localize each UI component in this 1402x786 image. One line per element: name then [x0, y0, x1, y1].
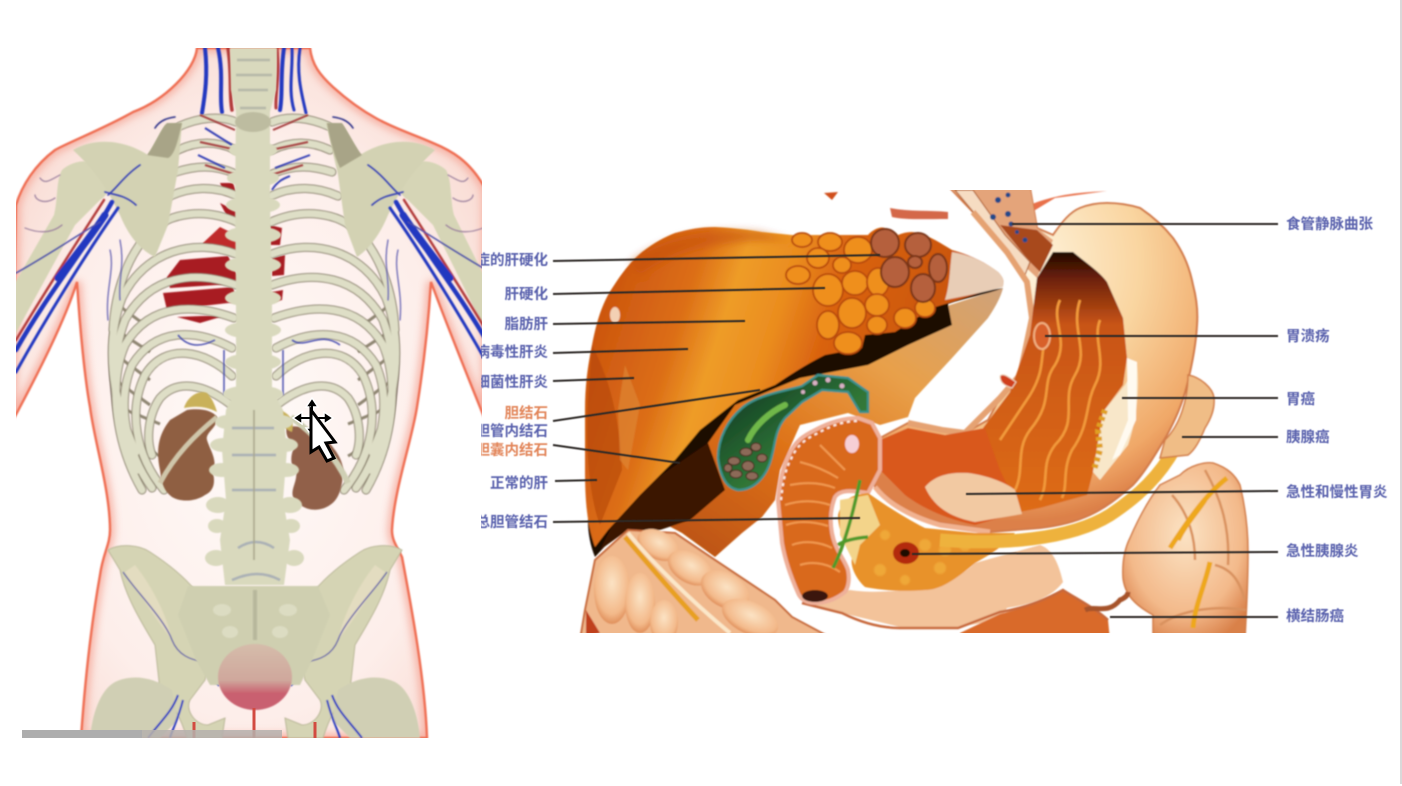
- lesion core: [900, 549, 910, 557]
- liver left darker mottling: [587, 345, 622, 525]
- liver labels: [461, 251, 548, 531]
- spine shading: [232, 60, 280, 580]
- colon lower red: [586, 610, 600, 636]
- right colon: [1123, 463, 1248, 640]
- left arm vessels: [16, 117, 175, 372]
- liver labels: 重症的肝硬化: [461, 251, 548, 269]
- duodenum scalloped lining: [781, 421, 858, 500]
- gallstones: [724, 443, 767, 480]
- liver labels: 脂肪肝: [504, 315, 548, 333]
- duodenum: [778, 418, 880, 603]
- main liver: [585, 227, 1003, 547]
- left colon: [580, 530, 835, 640]
- heart and lung red shapes: [163, 183, 285, 323]
- gallbladder green streak: [748, 405, 785, 440]
- liver labels: 病毒性肝炎: [476, 343, 548, 361]
- stomach labels: 急性胰腺炎: [1286, 542, 1359, 560]
- arm vessels and scapula: humerus left: [16, 161, 108, 333]
- stomach labels: [1286, 215, 1388, 625]
- rugae folds: [1000, 300, 1100, 500]
- lower colon peach: [802, 545, 1063, 627]
- pancreas tail tumour: [1160, 375, 1214, 458]
- gallbladder duct spots: [801, 378, 844, 394]
- esophagus dark lining: [1000, 225, 1053, 272]
- nub on lesser curve: [1000, 375, 1016, 388]
- lower colon dark: [960, 590, 1110, 640]
- left ribs: [112, 118, 237, 490]
- stomach labels: 横结肠癌: [1286, 607, 1344, 625]
- sacrum knobs: [213, 590, 297, 640]
- diaphragm strip: [890, 208, 948, 219]
- liver labels: 胆管内结石: [476, 422, 548, 440]
- page edge: [1400, 0, 1402, 784]
- body silhouette: [12, 48, 486, 738]
- stomach interior rugae: [983, 252, 1127, 512]
- left kidney: [158, 409, 217, 501]
- sacrum: [192, 585, 318, 686]
- body edge glow: [12, 48, 486, 738]
- sacrum-bladder: [218, 644, 292, 710]
- scapula shadow left: [147, 123, 182, 158]
- lower colon edge line: [802, 590, 1108, 628]
- stomach labels: 胰腺癌: [1286, 428, 1330, 446]
- liver labels: 总胆管结石: [476, 513, 548, 531]
- panel: skeletal torso back view: [12, 48, 492, 738]
- esophagus: [950, 188, 1053, 278]
- pale highlight: [610, 307, 620, 323]
- liver labels: 胆结石: [504, 404, 548, 422]
- esophagus pale strip: [955, 190, 1030, 275]
- stomach outer: [872, 188, 1197, 532]
- tangled vessels: [1085, 592, 1128, 610]
- panel: liver stomach diagram: [580, 188, 1248, 645]
- liver labels: 正常的肝: [490, 474, 548, 492]
- liver labels: 肝硬化: [504, 285, 548, 303]
- duodenum folds: [785, 445, 845, 572]
- duodenal ulcer: [845, 435, 859, 453]
- right colon folds: [1160, 470, 1246, 625]
- top fragments: [824, 192, 838, 200]
- humerus right: [400, 161, 482, 322]
- left pelvis: [90, 546, 225, 738]
- spine: [205, 48, 304, 585]
- white inner stripe: [1112, 358, 1137, 460]
- pancreas head: [838, 493, 1015, 591]
- right pelvis: [285, 546, 420, 738]
- rib crossing kidney: [160, 417, 217, 483]
- colon vessel: [625, 537, 698, 620]
- stomach lesser wall: [908, 212, 1032, 433]
- stomach labels: 食管静脉曲张: [1286, 215, 1373, 233]
- gastric ulcer: [1034, 323, 1050, 349]
- icon: cursor with move arrows: [293, 398, 335, 461]
- body outline: [12, 48, 486, 738]
- right kidney: [286, 426, 343, 510]
- scapula shadow right: [327, 123, 362, 168]
- lower liver lobe: [620, 288, 1003, 557]
- antrum: [880, 428, 1020, 525]
- stomach cancer pale patch: [1093, 365, 1138, 480]
- colon haustra: [594, 522, 784, 645]
- liver labels: 胆囊内结石: [476, 441, 548, 459]
- cancer edge bumps: [1094, 410, 1105, 470]
- ribs left back lines: [108, 306, 162, 458]
- liver mottled patch: [618, 365, 640, 470]
- right colon vessels: [1170, 478, 1227, 628]
- adrenal glands: [184, 392, 293, 432]
- esophagus dots: [990, 192, 1028, 242]
- stomach labels: 胃癌: [1286, 390, 1315, 408]
- antrum lower wall: [875, 487, 990, 532]
- stomach labels: 胃溃疡: [1286, 327, 1330, 345]
- upper rib vessels: [178, 115, 340, 395]
- top strip right: [1030, 191, 1107, 212]
- pancreatitis lesion: [893, 542, 919, 564]
- ribs right back lines: [346, 306, 400, 458]
- leader lines: [553, 224, 1278, 617]
- black shadow below liver: [588, 288, 1003, 557]
- cirrhosis nodules: [786, 233, 935, 354]
- duodenal dark base: [802, 590, 828, 602]
- neck vessels: [202, 48, 306, 113]
- pancreas tail band: [940, 448, 1175, 542]
- right ribs: [271, 118, 396, 490]
- shadow beneath gallbladder: [600, 443, 725, 550]
- liver top darker band: [630, 231, 790, 275]
- scapula left: [73, 123, 182, 257]
- gallbladder body: [718, 375, 868, 490]
- colon pale band: [628, 533, 730, 633]
- stomach labels: 急性和慢性胃炎: [1286, 483, 1388, 501]
- pancreas pale head: [840, 495, 880, 565]
- pancreas lobules: [874, 530, 971, 585]
- bottom vessel: [194, 708, 315, 738]
- liver labels: 细菌性肝炎: [476, 374, 548, 391]
- brown nodules: [871, 229, 947, 302]
- scapula right: [326, 123, 435, 257]
- liver pale tip: [945, 252, 1003, 300]
- gray progress bar: [22, 730, 282, 738]
- gastritis pale patch: [925, 473, 1022, 522]
- mirrored rib crossing kidney: [291, 417, 348, 483]
- right arm vessels: [333, 117, 492, 372]
- bile duct: [833, 480, 868, 568]
